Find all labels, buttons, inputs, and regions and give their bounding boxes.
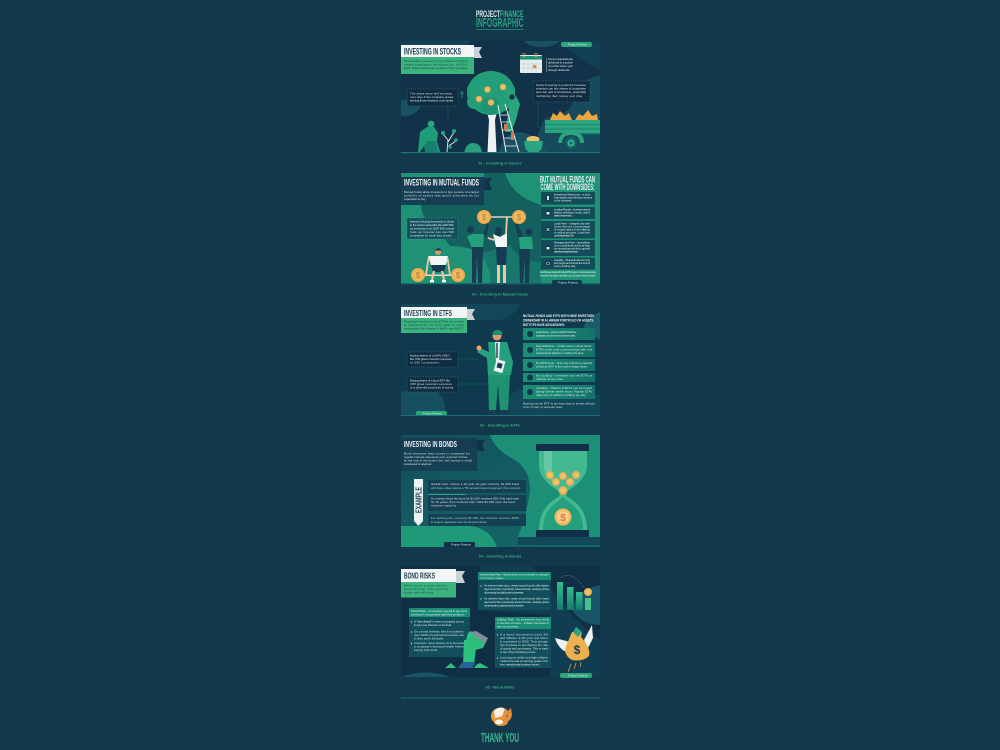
callout: bond etf: IVW gives investors exposure <box>410 382 452 386</box>
downside list: Investment Minimums – a fund <box>554 192 590 196</box>
callout: compounding: multiplying their money over time. <box>536 94 583 98</box>
panel: investing in etfs <box>401 304 600 416</box>
heading: bond risks: BOND RISKS <box>404 570 435 580</box>
panel: interest rate risk: in interest rates. <box>480 576 504 580</box>
callout: bond etf <box>407 377 490 392</box>
panel: investing in mutual funds: BUT MUTUAL FUNDS CAN <box>540 174 595 184</box>
badge: Project Finance <box>423 411 442 415</box>
panel: default risk: buying that bond. <box>414 648 438 652</box>
heading: downsides <box>540 174 595 192</box>
panel: inflation risk: the real purchase. <box>497 624 519 628</box>
badge: Project Finance <box>451 542 471 546</box>
closing note: investment option as they do not have these issues. <box>540 274 596 278</box>
icon: hourglass with coins <box>536 444 589 537</box>
heading: investing in mutual funds <box>401 177 492 190</box>
panel: default risk: Investors must assess and forecast <box>414 641 464 645</box>
callout: index funds <box>407 218 458 239</box>
panel: inflation risk: can increase to purchasing the rate <box>500 643 548 647</box>
example text boxes: Global Corp. issues a 10-year 10-year maturity, $1,000 bond <box>431 482 519 486</box>
panel: investing in mutual funds: COME WITH DOWNSIDES: <box>540 182 595 192</box>
panel: interest rate risk <box>478 572 551 610</box>
panel: inflation risk: in the loss of return – inflation decrease to <box>497 621 549 625</box>
callout: compounding: Stock investing is powerful because <box>536 83 586 87</box>
badge <box>561 42 592 47</box>
icon: team lifting barbell: $ <box>517 213 522 222</box>
advantages list: charges an annual expense ratio. <box>536 334 576 338</box>
panel: investing in bonds <box>401 435 600 547</box>
badge: Project Finance <box>568 42 587 46</box>
icon: kneeling gardener <box>418 121 440 152</box>
example text boxes: in coupon payments over the 10-year period. <box>431 520 487 524</box>
downside list: may require a set minimum amount <box>554 196 592 200</box>
callout: index funds: by investing in an S&P 500 mutual <box>410 226 454 230</box>
heading: etf advantages: OWNERSHIP IN A LARGER PORTFOLIO OF ASSETS, <box>523 318 594 322</box>
callout: single stock: like IVW gives investors exposure <box>410 357 452 361</box>
caption 04: 04 - Investing in Bonds <box>479 554 521 558</box>
intro text box <box>401 57 474 74</box>
panel: default risk: if they seek defaults. <box>414 636 444 640</box>
panel: inflation risk: Low-coupon yields and high inflation <box>500 656 548 660</box>
panel: default risk: over 100% of junk bond investors are <box>414 633 464 637</box>
panel: inflation risk: time, eating bonds long-term returns. <box>500 662 540 666</box>
panel: interest rate risk: of previously bought bonds to decrease. <box>484 590 524 594</box>
panel: inflation risk: of goods and purchases. This is hard <box>500 646 548 650</box>
example ribbon: EXAMPLE <box>414 487 424 513</box>
badge <box>416 411 447 416</box>
panel: inflation risk: If a bond investment pays 3% <box>500 632 548 636</box>
panel: inflation risk <box>495 617 551 668</box>
panel: investing in stocks <box>401 41 600 153</box>
icon: businessman <box>476 330 513 414</box>
icon: flying money bag: $ <box>574 643 581 657</box>
icon: calendar <box>520 53 542 73</box>
downside list: as several percent from growth <box>554 246 590 250</box>
panel: interest rate risk: As interest rates drop, newly issued bonds offer higher <box>484 584 549 588</box>
icon: flying money bag <box>555 625 593 672</box>
icon: money tree <box>467 71 515 152</box>
icon: falling bar chart <box>557 575 592 610</box>
intro text box <box>401 449 477 471</box>
panel: inflation risk: and inflation is 2% your real return <box>500 636 548 640</box>
intro text box: exchanges like shares of AAPL and MSFT. <box>404 326 464 330</box>
logo header: INFOGRAPHIC <box>476 16 524 30</box>
downside list: Locking Periods – investors cannot <box>554 208 590 212</box>
closing note <box>540 270 596 278</box>
intro text box <box>401 188 484 205</box>
intro text box: Mutual funds allow investors to buy a piece of a larger <box>404 190 479 194</box>
badge <box>444 542 475 547</box>
heading: investing in bonds <box>401 438 485 451</box>
intro text box: less earning, less earning <box>404 587 448 591</box>
downside list: can be higher than 2%. <box>554 234 574 238</box>
callout: single stock: to 500 companies. <box>410 360 440 364</box>
icon: team lifting barbell <box>467 210 533 283</box>
example text boxes: reaches maturity. <box>431 504 457 508</box>
icon: bush <box>464 143 482 153</box>
badge: Project Finance <box>568 673 588 677</box>
thank you: THANK YOU <box>481 731 519 745</box>
closing note: Exchange-traded funds (ETFs) are a more interesting <box>540 270 596 274</box>
panel: interest rate risk: Interest Rate Risk – Bond prices move inversely to changes <box>480 572 550 576</box>
example text boxes: For lending the company $1,000, the investor receives $350 <box>431 516 519 520</box>
intro text box: At the end of the bond's life, the investor's initial <box>404 458 472 462</box>
intro text box: investment is returned. <box>404 462 432 466</box>
example ribbon <box>414 479 424 526</box>
downside list: always withdraw money until a <box>554 210 590 214</box>
intro text box: Each share represents a piece of the company. <box>404 66 468 70</box>
advantages list: Diversification – Unlike some mutual funds, <box>536 344 592 348</box>
caption 05: 05 - Bond Risks <box>485 684 515 690</box>
callout: compounding <box>533 81 590 128</box>
callout: bond etf: to a diversified portfolio of bonds. <box>410 386 454 390</box>
callout: compounding: investors can buy shares of companies <box>536 87 587 91</box>
example text boxes: with face value paying a 7% annual interest payment (the coupon). <box>431 486 521 490</box>
panel: interest rate risk: payments than previously issued bonds, causing prices <box>484 587 550 591</box>
example text boxes <box>428 480 526 526</box>
intro text box <box>401 318 467 333</box>
logo header <box>476 9 524 30</box>
panel: default risk: longer pay interest on its debt. <box>414 623 452 627</box>
downside list: set time has ended. <box>554 214 572 218</box>
icon: basket of coins <box>524 136 543 152</box>
callout: share price: earning those investors more profits. <box>410 98 454 102</box>
dividends text: Some companies pay <box>548 57 574 61</box>
logo header: FINANCE <box>500 9 524 19</box>
dividends text <box>546 57 574 72</box>
intro text box: Stocks allow investors to buy shares of publicly <box>404 59 468 63</box>
caption 02: 02 - Investing in Mutual Funds <box>472 292 528 296</box>
heading: bond risks <box>401 569 465 583</box>
panel: investing in mutual funds <box>401 173 600 285</box>
heading: investing in bonds: INVESTING IN BONDS <box>404 439 457 449</box>
example text boxes: for 10 years, then receives their initial $1,000 upon the bond <box>431 500 515 504</box>
advantages list: to buy an ETF is the cost of single share. <box>536 364 588 368</box>
panel: inflation risk: is the US purchasing power. <box>500 650 536 654</box>
downside list: be bought and sold at the end of <box>554 261 590 265</box>
icon: ladder and picker <box>498 88 520 152</box>
intro text box: traded companies like Apple Inc. (AAPL). <box>404 63 468 67</box>
callout: index funds: Instead of buying thousands of stocks <box>410 220 455 224</box>
icon: sapling <box>441 129 458 152</box>
icon: broken bond <box>445 631 489 668</box>
callout: index funds: in the stock market like the S&P 500, <box>410 223 454 227</box>
icon: squatting lifter: $ <box>416 271 421 280</box>
panel: inflation risk: is increased to 3000. That change <box>500 640 548 644</box>
closing note <box>523 402 595 409</box>
advantages list: No Minimums – Pay only minimum needed <box>536 361 592 365</box>
heading: investing in stocks: INVESTING IN STOCKS <box>404 46 461 56</box>
callout: share price: The share price will increase <box>410 92 452 96</box>
downside list: to be invested. <box>554 198 572 202</box>
icon: squatting lifter <box>411 248 465 282</box>
heading: investing in etfs: INVESTING IN ETFS <box>404 308 452 318</box>
advantages list <box>523 328 595 399</box>
panel: interest rate risk: As interest rates fall, newly issued bonds offer lower <box>484 596 549 600</box>
panel: bond risks <box>401 566 600 678</box>
intro text box: portfolio of assets that would otherwise be too <box>404 193 479 197</box>
intro text box: expensive to buy. <box>404 197 426 201</box>
callout: index funds: companies for much less money. <box>410 234 452 238</box>
advantages list: Liquidity – Shares of ETFs can be traded <box>536 386 592 390</box>
callout: share price: over time if the company grows, <box>410 95 454 99</box>
callout: single stock: Buying shares of a AAPL-ONLY <box>410 354 450 358</box>
panel: interest rate risk: payments than previously issued bonds, causing prices <box>484 600 550 604</box>
badge: Project Finance <box>558 280 578 284</box>
panel: default risk: A "debt default" is when a company can no <box>414 620 464 624</box>
intro text box: bonds are still risky. <box>404 590 434 594</box>
advantages list: investments starting or selling the fees. <box>536 351 584 355</box>
panel: default risk: a company's financial health before <box>414 644 464 648</box>
callout: single stock <box>407 352 478 367</box>
dividends text: of profits share your <box>548 64 573 68</box>
intro text box <box>401 582 456 598</box>
advantages list: nobody at any time. <box>536 377 564 381</box>
icon: squatting lifter: $ <box>456 271 461 280</box>
callout: share price <box>407 89 464 122</box>
heading: etf advantages <box>523 314 594 327</box>
heading: investing in etfs <box>401 307 475 320</box>
heading: investing in mutual funds: INVESTING IN MUTUAL FUNDS <box>404 178 479 188</box>
downside list: funds that use a percentage <box>554 224 590 228</box>
intro text box: With more conservative, <box>404 584 448 588</box>
panel: default risk: Default Risk – A company may fail to pay bond <box>411 609 467 613</box>
advantages list: trade tens of millions of shares per day. <box>536 393 586 397</box>
intro text box: regular interest payments over a period of time. <box>404 455 468 459</box>
advantages list: ETFs cover only a percentage with low <box>536 348 593 352</box>
panel: inflation risk: Inflation Risk – An investment may result <box>497 618 549 622</box>
callout: bond etf: Buying shares of a bond ETF like <box>410 378 450 382</box>
advantages list: during normal market hours. Popular ETFs <box>536 390 593 394</box>
intro text box: Bond investors lend money in exchange for <box>404 452 470 456</box>
icon: trailer of gold <box>545 110 600 149</box>
closing note: a lot of risk, or account fees. <box>523 405 563 409</box>
panel: inflation risk: means the rate of earning power over <box>500 659 548 663</box>
dividends text: through dividends. <box>548 68 570 72</box>
callout: compounding: and own part of a business, potentially <box>536 90 587 94</box>
downside list: earned by managers each year. <box>554 250 578 254</box>
badge <box>560 673 592 678</box>
example text boxes: An investor buys the bond for $1,000, receives $35 (7%) each year <box>431 496 519 500</box>
heading: investing in stocks <box>401 45 482 58</box>
caption 01: 01 - Investing in Stocks <box>478 160 522 166</box>
caption 03: 03 - Investing in ETFs <box>480 422 520 428</box>
advantages list: No Locking – Investors can sell ETFs at <box>536 374 592 378</box>
icon: hourglass with coins: $ <box>560 513 566 524</box>
downside list: Liquidity – Mutual funds can only <box>554 258 591 262</box>
panel: default risk <box>409 608 470 657</box>
dividends text: dividends to a portion <box>548 61 573 65</box>
intro text box: Exchange-traded funds (ETFs) are similar <box>404 320 464 324</box>
downside list: on a mutual fund can be as high <box>554 244 590 248</box>
downside list: Load Fees – charged only with <box>554 222 590 226</box>
intro text box: to mutual funds, but they trade on stock <box>404 323 464 327</box>
heading: etf advantages: MUTUAL FUNDS AND ETFS BOTH HAVE INVESTORS <box>523 314 594 318</box>
badge <box>552 280 582 285</box>
heading: etf advantages: BUT ETFS HAVE ADVANTAGES: <box>523 323 565 327</box>
icon: team lifting barbell: $ <box>482 213 487 222</box>
downside list: Management Fees – annual fees <box>554 240 591 244</box>
icon: fox mascot <box>491 707 512 726</box>
advantages list: Lower Fees – A low-cost ETF fund fee <box>536 330 576 334</box>
downside list <box>541 192 595 270</box>
logo header: PROJECT <box>476 9 500 19</box>
panel: default risk: investors if it encounters cash flow problems. <box>411 612 465 616</box>
closing note: Buying into an ETF is an easy way to invest without <box>523 402 595 406</box>
downside list: or selling process. Load fees <box>554 230 591 234</box>
panel: interest rate risk: of previously bought bonds to increase. <box>484 604 524 608</box>
panel: default risk: On a bond investor, this is a problem; <box>414 630 464 634</box>
downside list: every trading day. <box>554 264 576 268</box>
downside list: of money raised in the offering <box>554 228 590 232</box>
callout: index funds: fund, an investor can own 500 <box>410 230 454 234</box>
